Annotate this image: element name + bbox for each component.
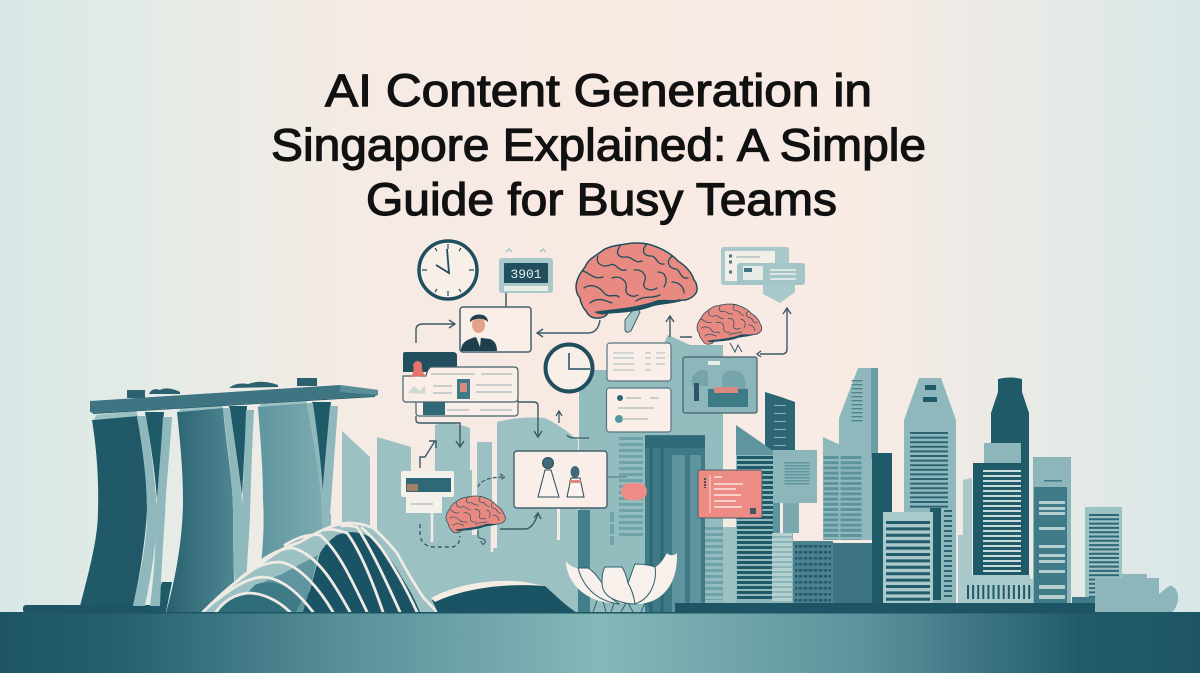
- dome: Gardens by the Bay: [203, 523, 437, 612]
- small brain: [697, 304, 762, 352]
- building: central teal tower: [612, 435, 714, 613]
- device with display: [499, 249, 553, 307]
- tower dark wedges: [145, 402, 331, 612]
- skyline: right-hand towers: [793, 368, 1178, 612]
- arrow: brain to centre card: [500, 513, 541, 529]
- dashed connector: [420, 524, 460, 547]
- title: [271, 65, 926, 225]
- arrow: down from card stack: [416, 416, 464, 447]
- arrow: right up to stack: [757, 308, 791, 357]
- water: [0, 612, 1200, 673]
- sky deck: [90, 385, 378, 413]
- pink card: [698, 470, 762, 518]
- deck gardens: [127, 378, 317, 398]
- arrow: brain to person card: [537, 320, 600, 337]
- clock two: [546, 344, 592, 392]
- tower two: [166, 408, 236, 613]
- card: text lines: [607, 343, 671, 381]
- arrow: from card stack to centre card: [518, 402, 542, 437]
- tower one: [80, 416, 147, 606]
- Marina Bay Sands: [80, 378, 378, 613]
- tower light strips: [94, 400, 338, 606]
- card stack: left profile: [403, 352, 518, 416]
- third brain: [446, 496, 505, 544]
- tower three: [256, 403, 323, 612]
- photo card: [683, 357, 757, 413]
- building: angled tower with dark lines: [736, 392, 817, 603]
- connector and pink tag: [607, 477, 647, 500]
- cards: top right stack: [721, 247, 805, 303]
- hill: [431, 581, 577, 613]
- card: small media: [401, 471, 492, 552]
- clock one: [419, 241, 477, 299]
- arrow: into person card: [416, 320, 455, 343]
- title: AI Content Generation in: [325, 65, 872, 116]
- centre card with two figures: [514, 451, 607, 508]
- arrow: up near centre: [556, 411, 589, 438]
- card: person portrait: [460, 307, 531, 352]
- title: Guide for Busy Teams: [366, 174, 837, 225]
- mid-ground pale city silhouette: [342, 335, 736, 612]
- card: list: [606, 388, 671, 432]
- ground strips: [23, 603, 1095, 613]
- device with display: 3901: [510, 267, 542, 282]
- arrow: up near small brain: [666, 316, 692, 337]
- arrow: up to the right: [420, 441, 436, 468]
- big brain: [576, 243, 697, 332]
- title: Singapore Explained: A Simple: [271, 120, 926, 170]
- lotus ArtScience Museum: [566, 553, 677, 612]
- dashed arrow: [478, 474, 505, 487]
